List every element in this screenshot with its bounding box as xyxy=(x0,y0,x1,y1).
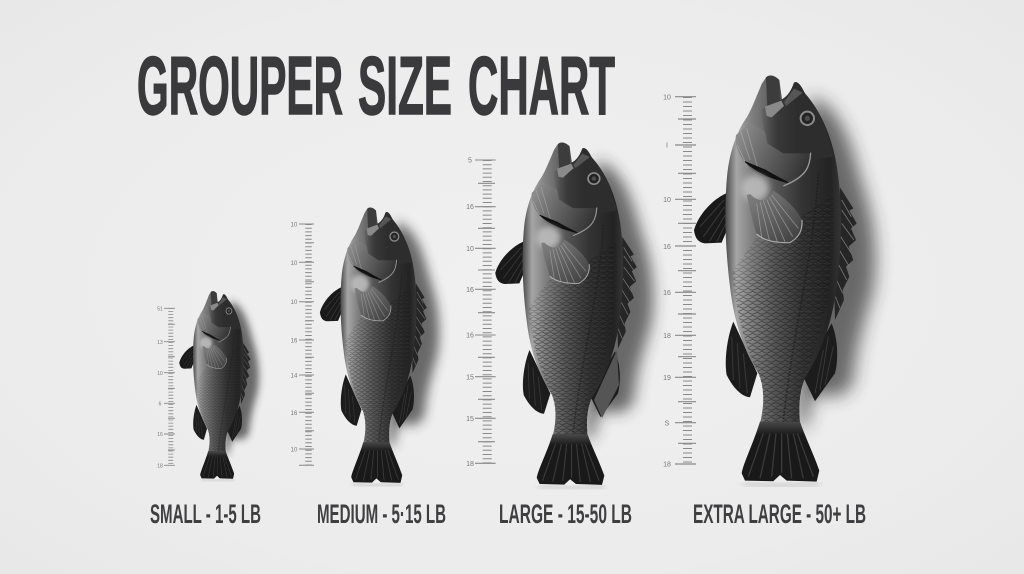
ruler: small: 13 xyxy=(157,340,163,346)
ruler: extra large: 10 xyxy=(663,94,671,102)
ruler: small xyxy=(157,306,175,470)
ruler: small: 16 xyxy=(157,432,163,438)
label: large: LARGE - 15-50 LB xyxy=(499,499,632,529)
ruler: large: 15 xyxy=(466,416,474,423)
ruler: large: 16 xyxy=(466,287,474,294)
ruler: extra large: 18 xyxy=(663,333,671,340)
ruler: medium: 14 xyxy=(291,374,298,380)
ruler: medium: 10 xyxy=(291,261,298,267)
ruler: extra large: 19 xyxy=(663,375,671,382)
label: medium: MEDIUM - 5·15 LB xyxy=(317,499,446,529)
large fish pale anal fin xyxy=(594,350,619,418)
ruler: large xyxy=(466,158,496,468)
ruler: large: 15 xyxy=(466,374,474,382)
ruler: large: 18 xyxy=(466,461,474,468)
fish: medium xyxy=(320,208,439,486)
ruler: large: 10 xyxy=(466,246,474,253)
ruler: extra large: S xyxy=(665,420,670,428)
ruler: extra large xyxy=(663,94,696,468)
ruler: medium xyxy=(291,222,314,466)
ruler: medium: 16 xyxy=(291,411,298,417)
ruler: medium: 10 xyxy=(291,300,298,306)
ruler: small: 18 xyxy=(157,464,163,470)
ruler: extra large: 10 xyxy=(663,197,671,204)
fish: small xyxy=(179,291,259,481)
title: SIZE xyxy=(358,39,452,132)
ruler: extra large: I xyxy=(666,142,668,150)
ruler: extra large: 16 xyxy=(663,290,671,297)
title: CHART xyxy=(468,39,615,132)
ruler: medium: 10 xyxy=(291,222,298,228)
label: extra large: EXTRA LARGE - 50+ LB xyxy=(693,499,866,529)
ruler: small: 6 xyxy=(159,402,162,408)
ruler: small: 10 xyxy=(157,371,163,377)
ruler: small: 51 xyxy=(157,306,163,312)
title: GROUPER xyxy=(137,39,343,132)
fish: large xyxy=(495,142,653,488)
ruler: large: 16 xyxy=(466,332,474,340)
ruler: extra large: 18 xyxy=(663,462,671,468)
ruler: extra large: 16 xyxy=(663,244,671,251)
fish: extra large xyxy=(694,76,875,486)
ruler: large: 16 xyxy=(466,204,474,211)
ruler: medium: 16 xyxy=(291,338,298,344)
ruler: medium: 10 xyxy=(291,448,298,454)
ruler: large: 5 xyxy=(468,158,472,164)
label: small: SMALL - 1-5 LB xyxy=(150,499,261,529)
